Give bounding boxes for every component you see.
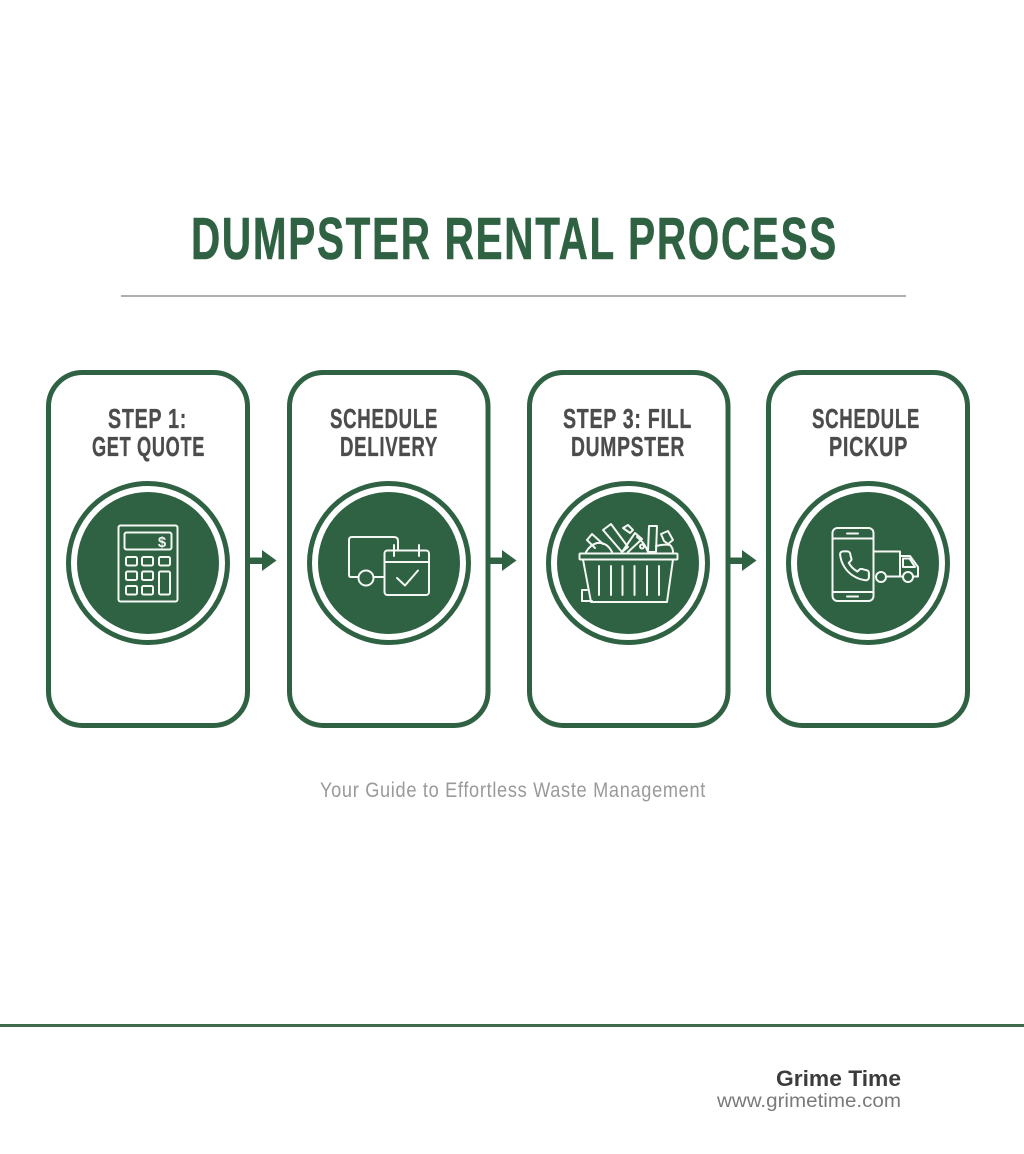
heading: schedule delivery: [330, 403, 438, 462]
tagline: Your Guide to Effortless Waste Management: [320, 779, 706, 802]
heading: schedule pickup: [812, 403, 920, 462]
company name: Grime Time: [776, 1066, 901, 1091]
heading: schedule delivery: SCHEDULE: [330, 403, 438, 434]
heading: step 1: [92, 403, 205, 462]
heading: schedule delivery: DELIVERY: [340, 431, 438, 462]
arrow: step 2 to step 3: [490, 550, 516, 571]
panel: step 3 fill dumpster: [530, 372, 728, 726]
arrow: step 1 to step 2: [250, 550, 276, 571]
heading: step 1: STEP 1:: [108, 403, 187, 434]
heading: schedule pickup: PICKUP: [829, 431, 908, 462]
icon: truck and calendar in circle: [310, 484, 468, 642]
icon: full dumpster in circle: [548, 484, 708, 642]
website: www.grimetime.com: [716, 1090, 901, 1112]
icon: calculator in circle: [68, 484, 228, 642]
heading: step 3 fill dumpster: DUMPSTER: [571, 431, 685, 462]
panel: step 4 schedule pickup: [768, 372, 968, 726]
panel: step 2 schedule delivery: [290, 372, 488, 726]
heading: step 3 fill dumpster: [563, 403, 692, 462]
heading: step 1: GET QUOTE: [92, 431, 205, 462]
heading: schedule pickup: SCHEDULE: [812, 403, 920, 434]
panel: step 1 get quote: [48, 372, 248, 726]
icon: calculator in circle: $: [158, 534, 167, 551]
footer brand: [716, 1066, 901, 1112]
heading: step 3 fill dumpster: STEP 3: FILL: [563, 403, 692, 434]
arrow: step 3 to step 4: [730, 550, 756, 571]
icon: phone and truck in circle: [788, 484, 948, 642]
